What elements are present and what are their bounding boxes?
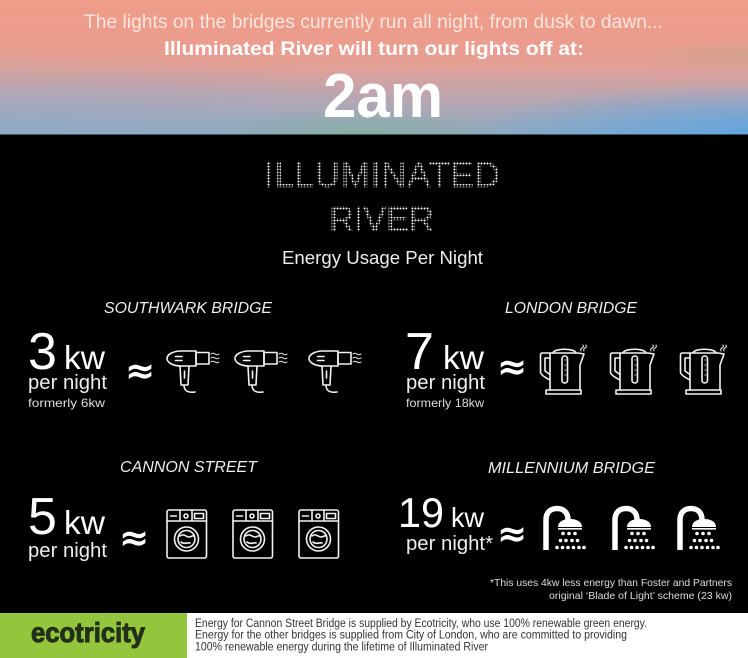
heading: SOUTHWARK BRIDGE (104, 300, 272, 317)
big time 2am: 2am (323, 62, 443, 131)
heading: LONDON BRIDGE (505, 300, 637, 317)
dotted logo title: RIVER (329, 200, 434, 239)
panel: Southwark Bridge: per night (28, 372, 107, 394)
panel: London Bridge: formerly 18kw (406, 396, 484, 410)
dotted logo title (264, 156, 500, 239)
dotted logo title: ILLUMINATED (264, 156, 500, 195)
panel: Millennium Bridge: per night* (406, 533, 493, 555)
footer text: Energy for Cannon Street Bridge is supplied by Ecotricity, who use 100% renewable green energy. (195, 618, 647, 630)
approx sign: ≈ (497, 514, 527, 555)
panel: London Bridge: per night (406, 372, 485, 394)
icons: kettles (540, 345, 726, 394)
panel: Cannon Street: kw (64, 504, 105, 541)
heading: MILLENNIUM BRIDGE (488, 460, 655, 477)
panel: Southwark Bridge (28, 300, 361, 410)
logo wordmark: ecotricity (31, 617, 145, 648)
icons: washing machines (167, 510, 338, 558)
footnote (490, 577, 732, 602)
panel: Millennium Bridge: kw (451, 502, 485, 533)
footer: green logo block (0, 613, 187, 658)
icons: hair dryers (167, 351, 361, 392)
footer text (195, 618, 647, 654)
header gradient panel (0, 0, 748, 134)
footnote: original ‘Blade of Light’ scheme (23 kw) (549, 590, 732, 602)
approx sign: ≈ (497, 347, 527, 388)
panel: Cannon Street (28, 459, 338, 562)
value 3 kw: 3 (28, 323, 57, 381)
value 7 kw: 7 (405, 323, 434, 381)
footer text: Energy for the other bridges is supplied from City of London, who are committed to providing (195, 630, 627, 642)
icons: showers (546, 508, 720, 550)
panel: Cannon Street: per night (28, 540, 107, 562)
approx sign: ≈ (125, 351, 155, 392)
footnote: *This uses 4kw less energy than Foster and Partners (490, 577, 732, 589)
footer text: 100% renewable energy during the lifetime of Illuminated River (195, 642, 488, 654)
approx sign: ≈ (119, 518, 149, 559)
panel: London Bridge (405, 300, 726, 410)
header statement: Illuminated River will turn our lights off at: (164, 39, 584, 60)
value 5 kw: 5 (28, 488, 57, 546)
panel: Millennium Bridge (398, 460, 720, 555)
heading: CANNON STREET (120, 459, 258, 476)
panel: Southwark Bridge: formerly 6kw (28, 396, 105, 410)
header intro line: The lights on the bridges currently run all night, from dusk to dawn... (84, 12, 663, 33)
panel: Southwark Bridge: kw (64, 339, 105, 376)
panel: London Bridge: kw (443, 339, 484, 376)
footer: white band (0, 613, 748, 658)
subtitle: Energy Usage Per Night (282, 248, 483, 268)
value 19 kw: 19 (398, 489, 444, 536)
